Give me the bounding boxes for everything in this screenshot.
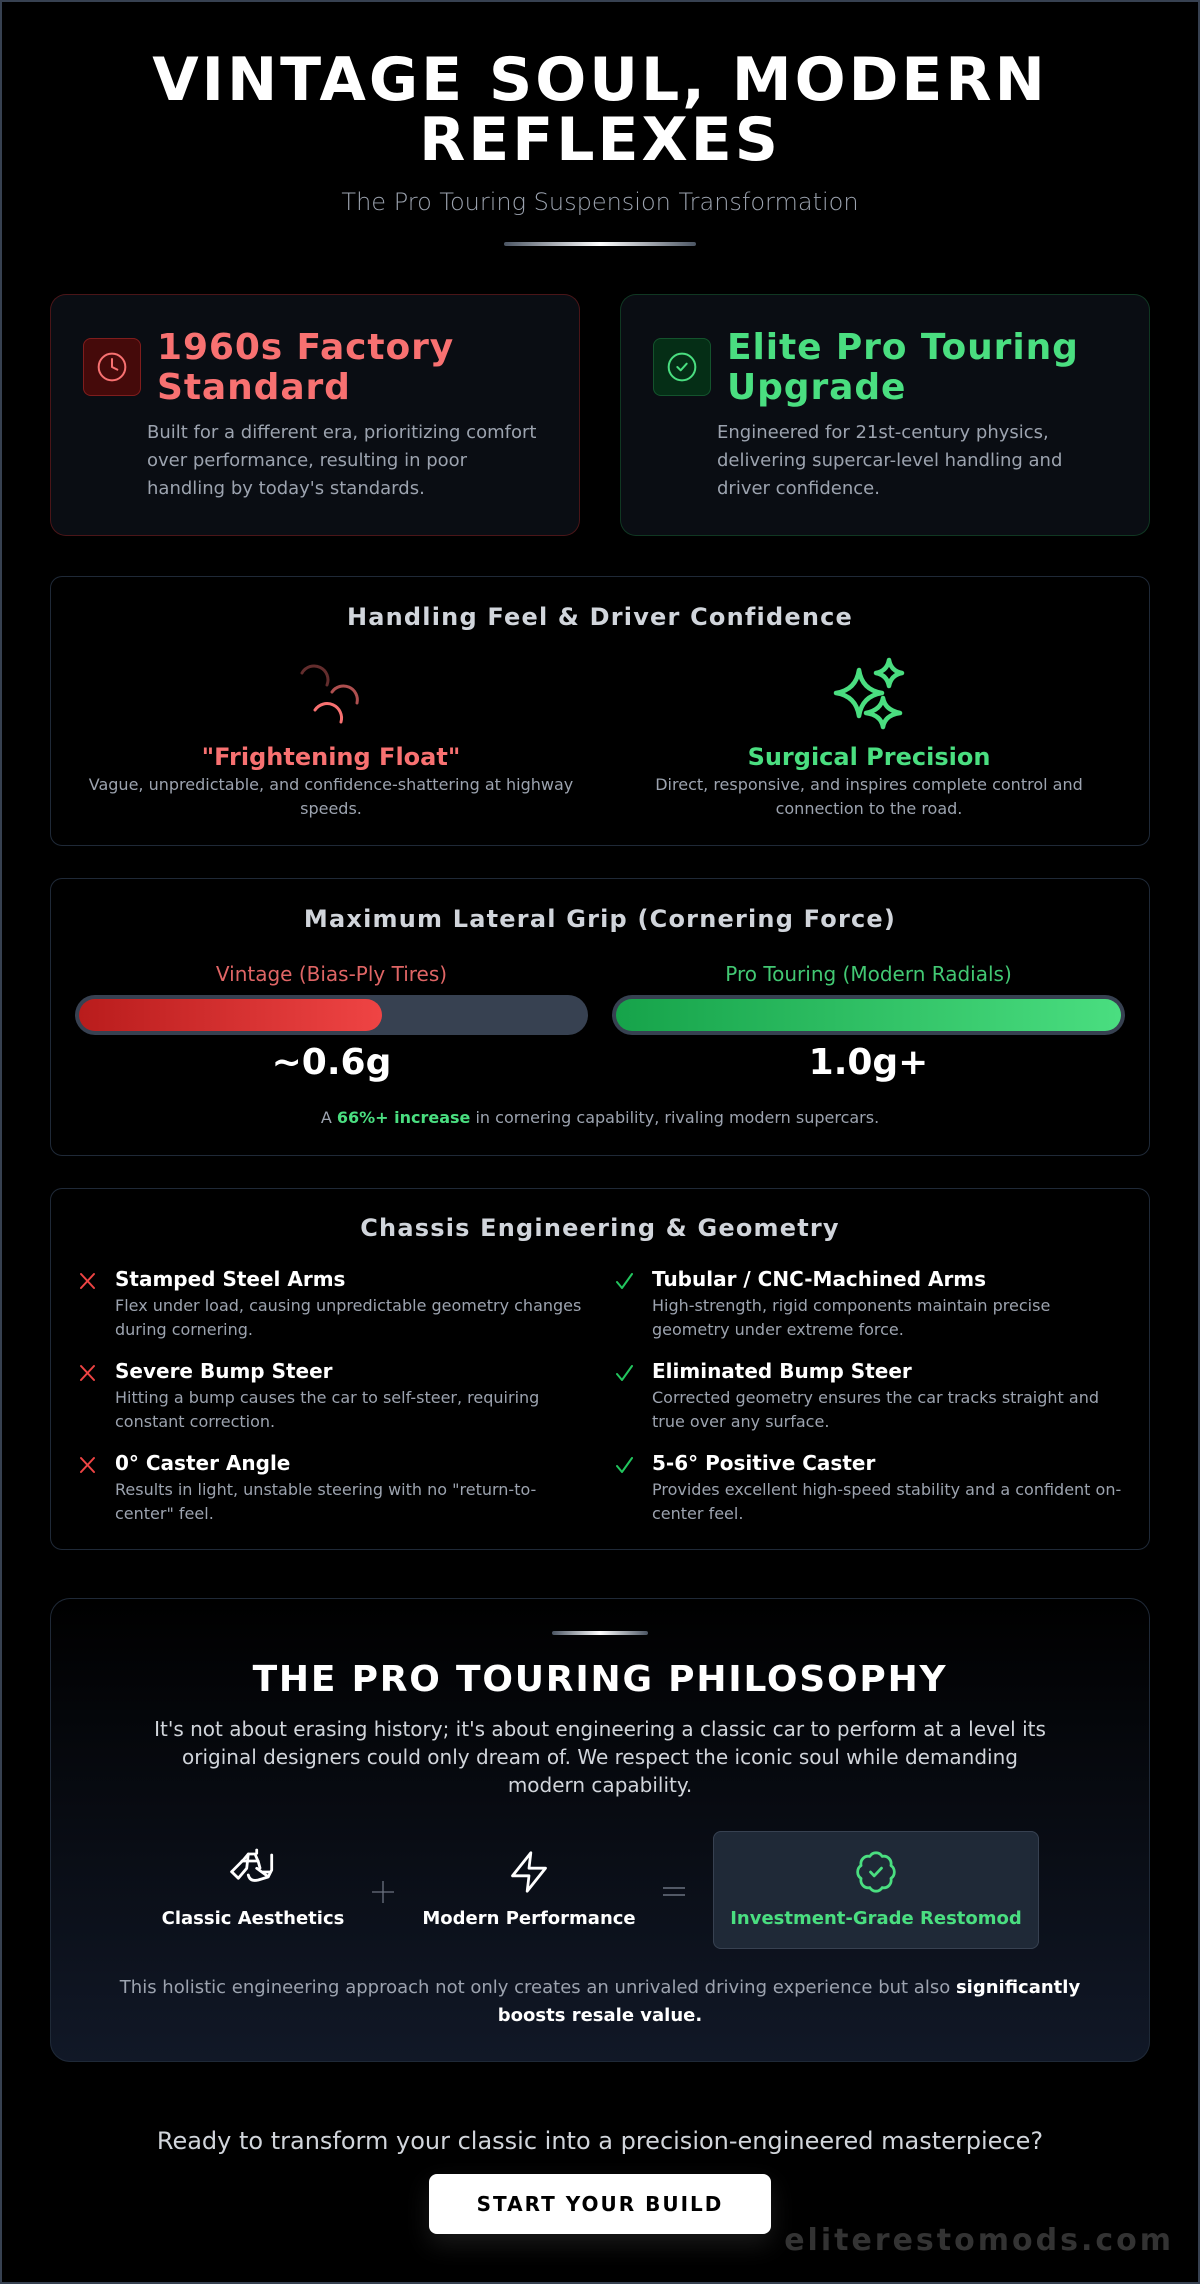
item: zero caster angle: center" feel. — [115, 1504, 214, 1523]
panel: elite pro touring upgrade — [620, 294, 1150, 536]
item: positive caster: center feel. — [652, 1504, 743, 1523]
item: severe bump steer: constant correction. — [115, 1412, 275, 1431]
vintage grip label: Vintage (Bias-Ply Tires) — [216, 962, 447, 986]
heading: Handling Feel & Driver Confidence — [347, 603, 853, 631]
description: handling by today's standards. — [147, 478, 425, 499]
equation: modern performance — [422, 1851, 636, 1929]
subtitle: The Pro Touring Suspension Transformation — [341, 188, 859, 216]
heading: elite pro touring upgrade — [727, 327, 1079, 408]
item: eliminated bump steer: Corrected geometry ensures the car tracks straight and — [652, 1388, 1099, 1407]
philosophy statement: original designers could only dream of. We respect the iconic soul while demanding — [182, 1745, 1018, 1769]
heading: Maximum Lateral Grip (Cornering Force) — [304, 905, 896, 933]
description: Engineered for 21st-century physics, — [717, 422, 1049, 443]
header divider — [504, 242, 696, 246]
icon: sparkles — [834, 658, 904, 730]
resale note: This holistic engineering approach not only creates an unrivaled driving experience but also significantly — [120, 1977, 1080, 1998]
icon: plus — [372, 1881, 394, 1903]
vintage grip value: ~0.6g — [272, 1042, 391, 1083]
panel: lateral grip chart — [50, 878, 1150, 1156]
resale note — [120, 1977, 1080, 2026]
item: tubular arms: geometry under extreme force. — [652, 1320, 904, 1339]
label: Investment-Grade Restomod — [730, 1908, 1022, 1929]
philosophy statement: It's not about erasing history; it's about engineering a classic car to perform at a level its — [154, 1717, 1046, 1741]
pro touring grip bar — [612, 995, 1125, 1035]
item: severe bump steer: Hitting a bump causes the car to self-steer, requiring — [115, 1388, 539, 1407]
description: driver confidence. — [717, 478, 880, 499]
button: start your build: START YOUR BUILD — [477, 2192, 723, 2216]
resale note: boosts resale value. — [498, 2005, 702, 2026]
heading: 1960s factory standard: Standard — [157, 367, 351, 408]
vintage description: speeds. — [300, 799, 362, 818]
title: REFLEXES — [419, 105, 781, 175]
item: stamped steel arms: Stamped Steel Arms — [115, 1267, 345, 1291]
description — [717, 422, 1062, 499]
item: severe bump steer: Severe Bump Steer — [115, 1359, 333, 1383]
item: eliminated bump steer: Eliminated Bump Steer — [652, 1359, 912, 1383]
title: VINTAGE SOUL, MODERN — [152, 45, 1048, 115]
item: zero caster angle: Results in light, unstable steering with no "return-to- — [115, 1480, 536, 1499]
item: eliminated bump steer — [616, 1359, 1099, 1431]
watermark: eliterestomods.com — [784, 2223, 1174, 2258]
vintage grip bar — [75, 995, 588, 1035]
vintage bar fill — [79, 999, 382, 1031]
panel: philosophy — [50, 1598, 1150, 2062]
item: zero caster angle — [80, 1451, 536, 1523]
pro touring description: connection to the road. — [776, 799, 962, 818]
icon: classic car — [230, 1848, 274, 1882]
icon: float arcs — [300, 664, 359, 724]
philosophy divider — [552, 1631, 648, 1635]
item: tubular arms — [616, 1267, 1050, 1339]
heading: 1960s factory standard — [157, 327, 454, 408]
item: stamped steel arms: during cornering. — [115, 1320, 253, 1339]
description: over performance, resulting in poor — [147, 450, 467, 471]
button: start your build — [429, 2174, 771, 2234]
item: positive caster: Provides excellent high-speed stability and a confident on- — [652, 1480, 1121, 1499]
description — [147, 422, 536, 499]
item: tubular arms: Tubular / CNC-Machined Arms — [652, 1267, 986, 1291]
vintage description — [88, 775, 573, 818]
title — [152, 45, 1048, 175]
label: Classic Aesthetics — [162, 1908, 344, 1929]
icon: verified badge — [856, 1851, 896, 1893]
heading: elite pro touring upgrade: Upgrade — [727, 367, 906, 408]
item: stamped steel arms: Flex under load, causing unpredictable geometry changes — [115, 1296, 581, 1315]
philosophy statement — [154, 1717, 1046, 1797]
equation: classic aesthetics — [162, 1848, 344, 1929]
icon: lightning bolt — [511, 1851, 547, 1893]
vintage label: "Frightening Float" — [202, 743, 460, 771]
icon: equals — [663, 1887, 685, 1896]
label: Modern Performance — [422, 1908, 636, 1929]
panel: chassis engineering — [50, 1188, 1150, 1550]
heading: elite pro touring upgrade: Elite Pro Touring — [727, 327, 1079, 368]
item: eliminated bump steer: true over any surface. — [652, 1412, 829, 1431]
equation result box — [713, 1831, 1039, 1949]
call to action text: Ready to transform your classic into a precision-engineered masterpiece? — [157, 2127, 1043, 2155]
grip takeaway: A 66%+ increase in cornering capability, rivaling modern supercars. — [321, 1108, 879, 1127]
heading: THE PRO TOURING PHILOSOPHY — [253, 1659, 947, 1700]
item: zero caster angle: 0° Caster Angle — [115, 1451, 290, 1475]
item: positive caster: 5-6° Positive Caster — [652, 1451, 875, 1475]
description: Built for a different era, prioritizing comfort — [147, 422, 536, 443]
pro touring grip label: Pro Touring (Modern Radials) — [725, 962, 1012, 986]
item: severe bump steer — [80, 1359, 539, 1431]
pro touring description — [655, 775, 1083, 818]
pro touring bar fill — [616, 999, 1121, 1031]
vintage description: Vague, unpredictable, and confidence-shattering at highway — [89, 775, 573, 794]
icon: check circle — [653, 338, 711, 396]
panel: handling feel — [50, 576, 1150, 846]
pro touring grip value: 1.0g+ — [809, 1042, 928, 1083]
item: positive caster — [616, 1451, 1121, 1523]
item: tubular arms: High-strength, rigid components maintain precise — [652, 1296, 1050, 1315]
description: delivering supercar-level handling and — [717, 450, 1062, 471]
item: stamped steel arms — [80, 1267, 581, 1339]
philosophy statement: modern capability. — [508, 1773, 692, 1797]
panel: 1960s factory standard — [50, 294, 580, 536]
heading: 1960s factory standard: 1960s Factory — [157, 327, 454, 368]
icon: clock — [83, 338, 141, 396]
pro touring label: Surgical Precision — [748, 743, 990, 771]
heading: Chassis Engineering & Geometry — [360, 1214, 840, 1242]
pro touring description: Direct, responsive, and inspires complete control and — [655, 775, 1083, 794]
